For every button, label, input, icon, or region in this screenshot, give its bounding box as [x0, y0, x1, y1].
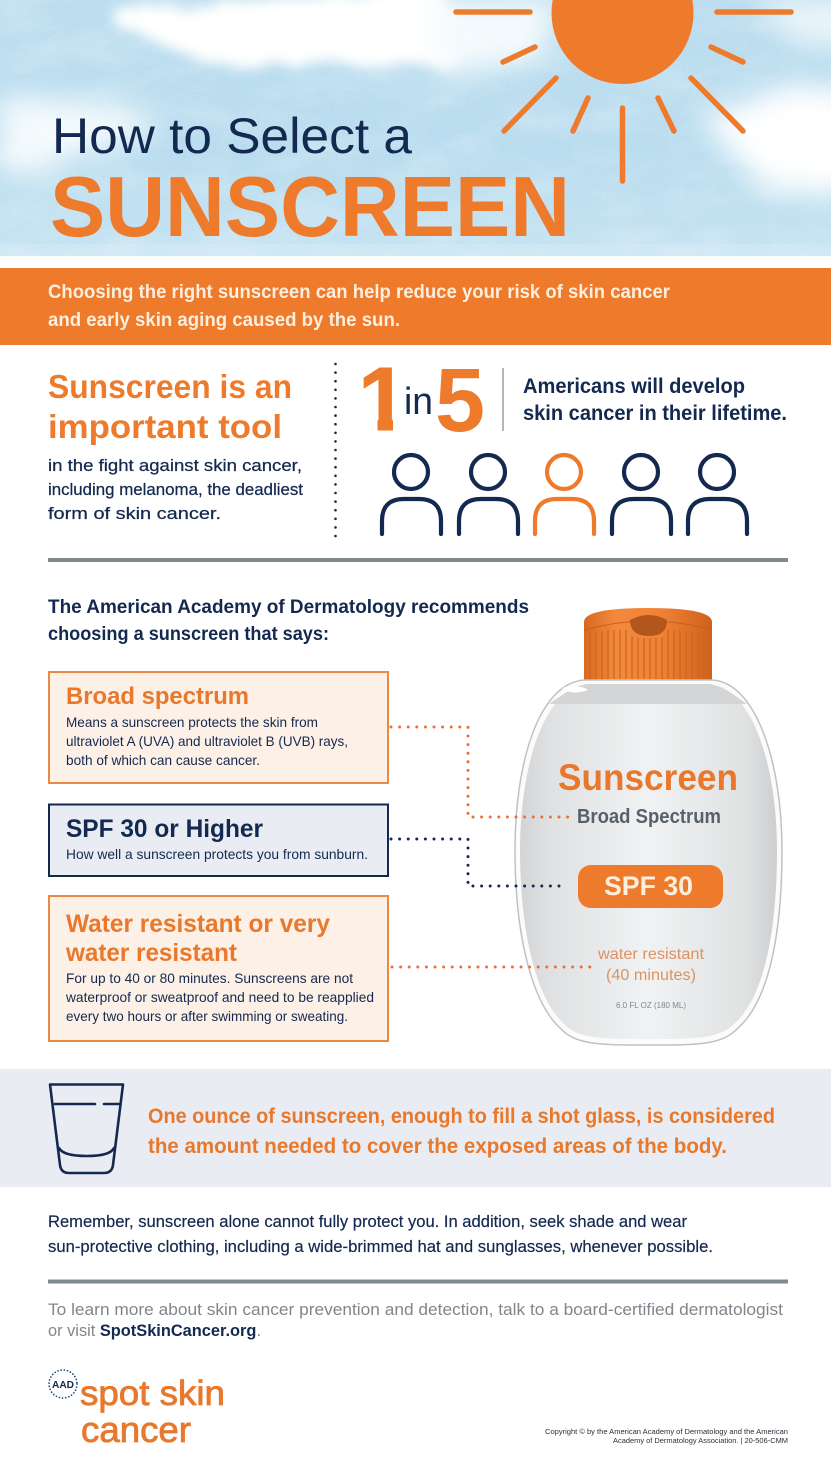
- intro banner: and early skin aging caused by the sun.: [48, 310, 400, 331]
- intro banner: Choosing the right sunscreen can help reduce your risk of skin cancer: [48, 282, 671, 303]
- heading: academy recommendation: The American Academy of Dermatology recommends: [48, 597, 529, 618]
- panel: broad spectrum: Broad spectrum: [66, 683, 249, 710]
- text block: learn more: or visit SpotSkinCancer.org.: [48, 1321, 261, 1340]
- statistic: 1 in 5: [364, 368, 483, 432]
- bottle cap: [584, 608, 712, 680]
- bottle label: 6.0 FL OZ (180 ML): [616, 1001, 686, 1010]
- text block: remember: sun-protective clothing, including a wide-brimmed hat and sunglasses, whenever possible.: [48, 1237, 713, 1256]
- statistic: 1 in 5: 5: [435, 351, 485, 451]
- logo: AAD spot skin cancer: spot skin: [80, 1374, 225, 1413]
- title: SUNSCREEN: [50, 160, 570, 255]
- panel: water resistant: [49, 896, 388, 1041]
- heading: sunscreen is an important tool: [48, 368, 292, 445]
- text block: fight against skin cancer: [48, 456, 303, 523]
- logo: AAD spot skin cancer: [49, 1370, 225, 1450]
- panel: water resistant: waterproof or sweatproof and need to be reapplied: [65, 989, 374, 1005]
- icon: five people, one highlighted: [382, 455, 747, 534]
- text block: fight against skin cancer: form of skin cancer.: [48, 504, 221, 523]
- panel: water resistant: For up to 40 or 80 minutes. Sunscreens are not: [66, 970, 353, 986]
- connector: SPF to bottle: [391, 839, 566, 886]
- intro banner: [0, 268, 831, 345]
- header: watercolor sky background: [0, 0, 831, 260]
- title: [50, 108, 570, 255]
- heading: sunscreen is an important tool: Sunscreen is an: [48, 368, 292, 405]
- title: How to Select a: [52, 108, 412, 164]
- logo: AAD spot skin cancer: AAD: [52, 1379, 74, 1391]
- text block: Americans will develop skin cancer: skin cancer in their lifetime.: [523, 402, 787, 425]
- panel: one ounce callout: [0, 1069, 831, 1187]
- panel: SPF 30 or higher: [49, 804, 388, 876]
- heading: sunscreen is an important tool: important tool: [48, 408, 282, 445]
- panel: broad spectrum: [49, 672, 388, 783]
- panel: broad spectrum: ultraviolet A (UVA) and ultraviolet B (UVB) rays,: [66, 733, 348, 749]
- bottle label: water resistant: [597, 946, 705, 963]
- text block: Americans will develop skin cancer: [523, 375, 787, 425]
- bottle label: (40 minutes): [606, 967, 696, 984]
- text block: fight against skin cancer: including melanoma, the deadliest: [48, 480, 303, 499]
- bottle label: Sunscreen: [558, 757, 738, 798]
- icon: sunscreen bottle: [515, 608, 782, 1045]
- bottle body: [515, 680, 782, 1045]
- bottle label: [558, 757, 738, 1010]
- icon: sun with rays: [456, 0, 791, 181]
- logo: AAD spot skin cancer: cancer: [81, 1409, 191, 1450]
- heading: academy recommendation: choosing a sunscreen that says:: [48, 624, 329, 645]
- panel: water resistant: every two hours or after swimming or sweating.: [66, 1008, 348, 1024]
- copyright: Copyright © by the American Academy of Dermatology and the American: [545, 1427, 788, 1436]
- text block: remember: [48, 1212, 713, 1256]
- panel: broad spectrum: both of which can cause cancer.: [66, 752, 260, 768]
- bottle label: SPF 30: [604, 871, 693, 901]
- panel: SPF 30 or higher: SPF 30 or Higher: [66, 815, 263, 843]
- panel: water resistant: water resistant: [65, 939, 238, 967]
- panel: water resistant: Water resistant or very: [66, 910, 330, 938]
- panel: SPF 30 or higher: How well a sunscreen protects you from sunburn.: [66, 846, 368, 862]
- panel: one ounce callout: the amount needed to cover the exposed areas of the body.: [148, 1135, 727, 1158]
- copyright: Academy of Dermatology Association. | 20-506-CMM: [613, 1436, 788, 1445]
- connector: water resistant to bottle: [392, 966, 590, 968]
- copyright: [545, 1427, 788, 1445]
- bottle label: Broad Spectrum: [577, 806, 721, 828]
- connector: broad spectrum to bottle: [391, 727, 570, 817]
- panel: one ounce callout: One ounce of sunscreen, enough to fill a shot glass, is considered: [148, 1105, 775, 1128]
- text block: fight against skin cancer: in the fight against skin cancer,: [48, 456, 302, 475]
- icon: shot glass: [50, 1084, 123, 1173]
- text block: remember: Remember, sunscreen alone cannot fully protect you. In addition, seek shade and wear: [48, 1212, 687, 1231]
- statistic: 1 in 5: 1: [358, 350, 408, 450]
- heading: academy recommendation: [48, 597, 529, 645]
- statistic: 1 in 5: in: [404, 381, 433, 423]
- panel: broad spectrum: Means a sunscreen protects the skin from: [66, 714, 318, 730]
- text block: learn more: To learn more about skin cancer prevention and detection, talk to a board-certified dermatologist: [48, 1300, 783, 1319]
- text block: learn more: [48, 1300, 783, 1340]
- text block: Americans will develop skin cancer: Americans will develop: [523, 375, 745, 398]
